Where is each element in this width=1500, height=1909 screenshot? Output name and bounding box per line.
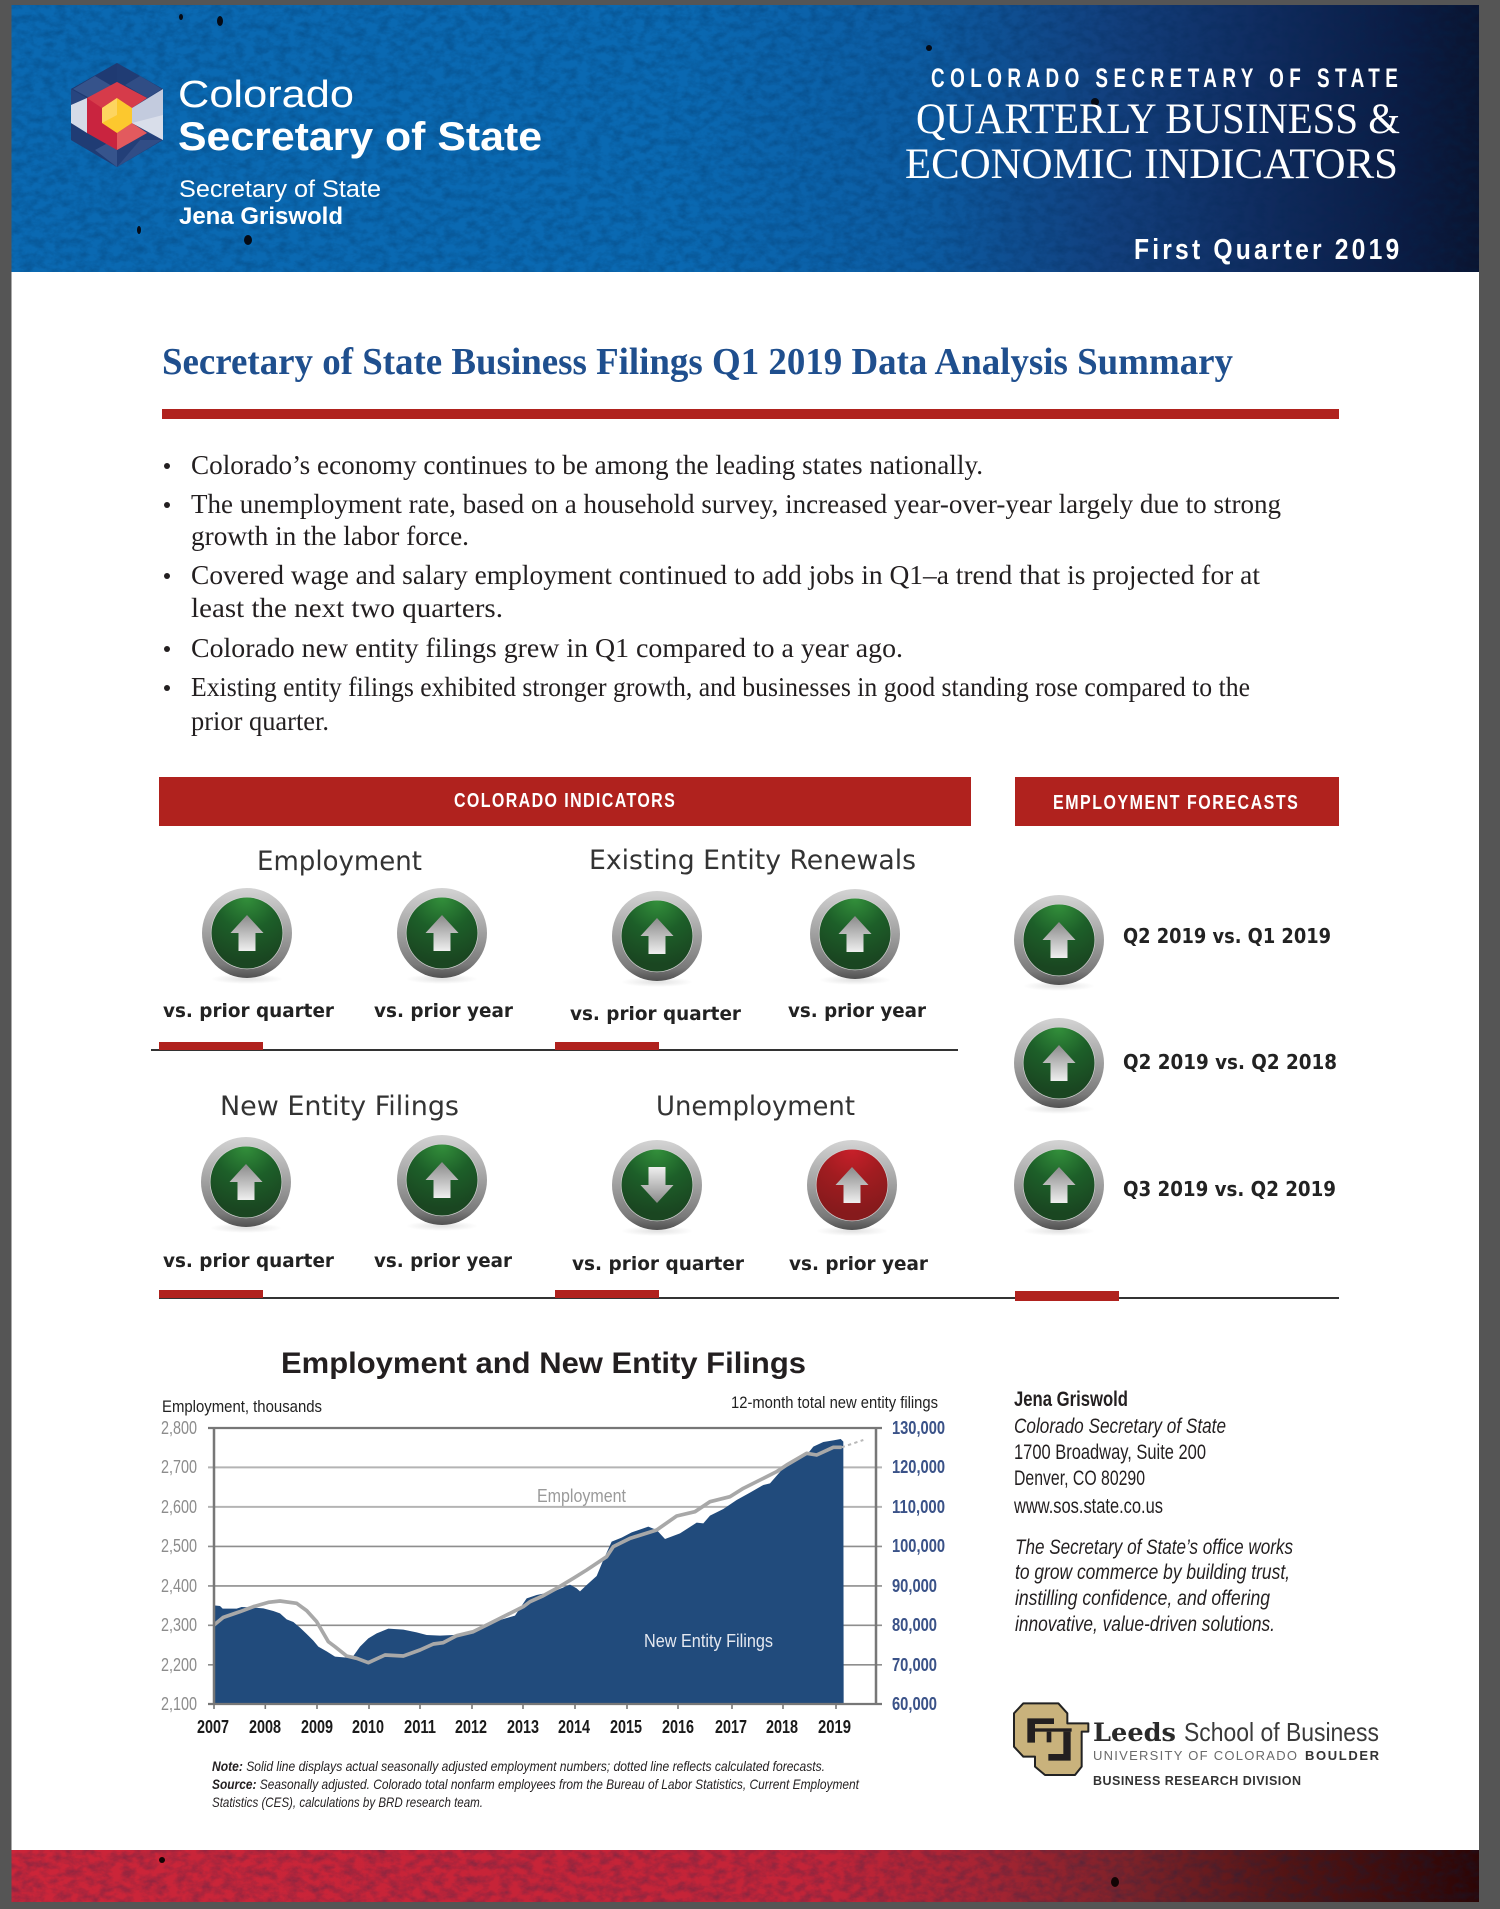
contact details: Jena Griswold: [1014, 1388, 1128, 1411]
Leeds School of Business logo: BOULDER: [1305, 1748, 1380, 1763]
right axis labels: 90,000: [892, 1575, 937, 1596]
indicator: unemployment: vs. prior quarter: [572, 1253, 745, 1275]
indicator: new entity filings: vs. prior quarter: [163, 1250, 335, 1272]
year labels: 2012: [455, 1717, 487, 1737]
right axis labels: 70,000: [892, 1654, 937, 1675]
indicator: employment: vs. prior quarter: [163, 1000, 335, 1022]
chart: employment and new entity filings: [161, 1347, 945, 1810]
left axis labels: 2,300: [161, 1614, 197, 1635]
left axis labels: 2,600: [161, 1496, 197, 1517]
indicator: employment: vs. prior year: [374, 1000, 514, 1022]
indicator: employment: Employment: [257, 846, 422, 877]
summary bullets: Colorado new entity filings grew in Q1 compared to a year ago.: [191, 633, 903, 663]
footer band: [12, 1850, 1479, 1902]
summary bullets: least the next two quarters.: [191, 593, 503, 623]
chart title: Employment and New Entity Filings: [281, 1347, 806, 1380]
year labels: 2010: [352, 1717, 384, 1737]
series label: new entity filings: New Entity Filings: [644, 1631, 773, 1651]
summary bullets: The unemployment rate, based on a household survey, increased year-over-year largely due to strong: [191, 489, 1281, 519]
chart notes: Statistics (CES), calculations by BRD research team.: [212, 1794, 483, 1810]
indicator: unemployment: vs. prior year: [789, 1253, 929, 1275]
icon: Colorado hexagon logo: [71, 63, 163, 167]
forecast: Q3 2019 vs Q2 2019: Q3 2019 vs. Q2 2019: [1123, 1177, 1336, 1201]
indicator: new entity filings: [163, 1091, 513, 1272]
report title block: QUARTERLY BUSINESS &: [916, 96, 1400, 143]
indicator: unemployment: Unemployment: [656, 1091, 855, 1122]
right axis labels: 110,000: [892, 1496, 945, 1517]
contact details: 1700 Broadway, Suite 200: [1014, 1441, 1206, 1464]
year labels: 2007: [197, 1717, 229, 1737]
Leeds School of Business logo: School of Business: [1184, 1717, 1379, 1747]
logo text: Colorado: [178, 74, 354, 116]
contact details: [1013, 1388, 1226, 1518]
logo text: Secretary of State: [178, 115, 542, 159]
line: employment actual: [214, 1447, 842, 1663]
contact details: www.sos.state.co.us: [1013, 1495, 1163, 1518]
left axis labels: 2,200: [161, 1654, 197, 1675]
left axis labels: 2,400: [161, 1575, 197, 1596]
summary bullets: [164, 450, 1281, 736]
officeholder name: [179, 176, 381, 230]
panel: employment forecasts: [1014, 777, 1339, 1236]
year labels: 2018: [766, 1717, 798, 1737]
icon: CU emblem: [1014, 1703, 1088, 1775]
year labels: 2008: [249, 1717, 281, 1737]
report title block: COLORADO SECRETARY OF STATE: [931, 63, 1398, 93]
contact details: Colorado Secretary of State: [1014, 1415, 1226, 1438]
Leeds School of Business logo: [1014, 1703, 1380, 1788]
report title block: First Quarter 2019: [1134, 233, 1399, 265]
forecast: Q2 2019 vs Q2 2018: [1014, 1018, 1337, 1114]
forecast: Q3 2019 vs Q2 2019: [1014, 1140, 1336, 1236]
summary bullets: Colorado’s economy continues to be among the leading states nationally.: [191, 450, 983, 480]
year labels: 2019: [818, 1717, 851, 1737]
indicator: existing entity renewals: Existing Entity Renewals: [589, 845, 916, 876]
right axis labels: 130,000: [892, 1417, 945, 1438]
area: new entity filings: [214, 1439, 844, 1704]
summary bullets: prior quarter.: [191, 706, 329, 736]
header banner: [12, 5, 1479, 272]
Leeds School of Business logo: Leeds: [1093, 1718, 1176, 1747]
year labels: [197, 1717, 851, 1737]
left axis labels: 2,500: [161, 1535, 197, 1556]
indicator: new entity filings: New Entity Filings: [220, 1091, 459, 1122]
year labels: 2015: [610, 1717, 642, 1737]
right axis labels: 100,000: [892, 1535, 945, 1556]
summary bullets: growth in the labor force.: [191, 521, 469, 551]
officeholder name: Jena Griswold: [179, 203, 343, 230]
Leeds School of Business logo: BUSINESS RESEARCH DIVISION: [1093, 1774, 1301, 1788]
year labels: 2013: [507, 1717, 539, 1737]
panel: Colorado indicators: [151, 777, 971, 1275]
right axis labels: 60,000: [892, 1693, 937, 1714]
officeholder name: Secretary of State: [179, 176, 381, 203]
summary bullets: Covered wage and salary employment continued to add jobs in Q1–a trend that is projected for at: [191, 560, 1260, 590]
left axis labels: [161, 1417, 197, 1714]
mission statement: to grow commerce by building trust,: [1015, 1561, 1290, 1584]
logo text: [178, 74, 542, 159]
left axis labels: 2,100: [161, 1693, 197, 1714]
indicator: unemployment: [572, 1091, 929, 1275]
chart notes: [212, 1758, 860, 1810]
year labels: 2017: [715, 1717, 747, 1737]
report title block: ECONOMIC INDICATORS: [905, 141, 1398, 188]
contact details: Denver, CO 80290: [1014, 1467, 1145, 1490]
year labels: 2009: [301, 1717, 333, 1737]
report title block: [905, 63, 1400, 265]
mission statement: The Secretary of State’s office works: [1015, 1536, 1293, 1559]
left axis labels: 2,700: [161, 1456, 197, 1477]
header bar: Colorado indicators: COLORADO INDICATORS: [454, 789, 675, 811]
year labels: 2014: [558, 1717, 590, 1737]
mission statement: innovative, value-driven solutions.: [1015, 1613, 1275, 1636]
header bar: employment forecasts: EMPLOYMENT FORECASTS: [1053, 791, 1298, 813]
right axis labels: [892, 1417, 945, 1714]
summary heading: Secretary of State Business Filings Q1 2019 Data Analysis Summary: [162, 341, 1233, 383]
indicator: employment: [163, 846, 514, 1022]
year labels: 2011: [404, 1717, 436, 1737]
mission statement: [1015, 1536, 1293, 1636]
indicator: existing entity renewals: vs. prior quarter: [570, 1003, 742, 1025]
forecast: Q2 2019 vs Q1 2019: [1014, 895, 1331, 991]
line: employment forecast: [842, 1440, 863, 1447]
series label: employment: Employment: [537, 1486, 626, 1506]
indicator: existing entity renewals: vs. prior year: [788, 1000, 927, 1022]
summary heading: [162, 341, 1339, 419]
right axis labels: 80,000: [892, 1614, 937, 1635]
left axis title: Employment, thousands: [162, 1397, 322, 1416]
indicator: new entity filings: vs. prior year: [374, 1250, 513, 1272]
left axis labels: 2,800: [161, 1417, 197, 1438]
indicator: existing entity renewals: [570, 845, 927, 1025]
forecast: Q2 2019 vs Q2 2018: Q2 2019 vs. Q2 2018: [1123, 1050, 1337, 1074]
summary bullets: Existing entity filings exhibited stronger growth, and businesses in good standing rose compared to the: [191, 672, 1250, 702]
forecast: Q2 2019 vs Q1 2019: Q2 2019 vs. Q1 2019: [1123, 924, 1331, 948]
mission statement: instilling confidence, and offering: [1015, 1587, 1270, 1610]
right axis labels: 120,000: [892, 1456, 945, 1477]
right axis title: 12-month total new entity filings: [731, 1393, 938, 1412]
header bar: employment forecasts: [1015, 777, 1339, 826]
chart notes: Note: Solid line displays actual seasonally adjusted employment numbers; dotted line reflects calculated forecasts.: [212, 1758, 825, 1774]
year labels: 2016: [662, 1717, 694, 1737]
header bar: Colorado indicators: [159, 777, 971, 826]
chart notes: Source: Seasonally adjusted. Colorado total nonfarm employees from the Bureau of Labor Statistics, Current Employment: [212, 1776, 860, 1792]
Leeds School of Business logo: UNIVERSITY OF COLORADO: [1093, 1748, 1297, 1763]
